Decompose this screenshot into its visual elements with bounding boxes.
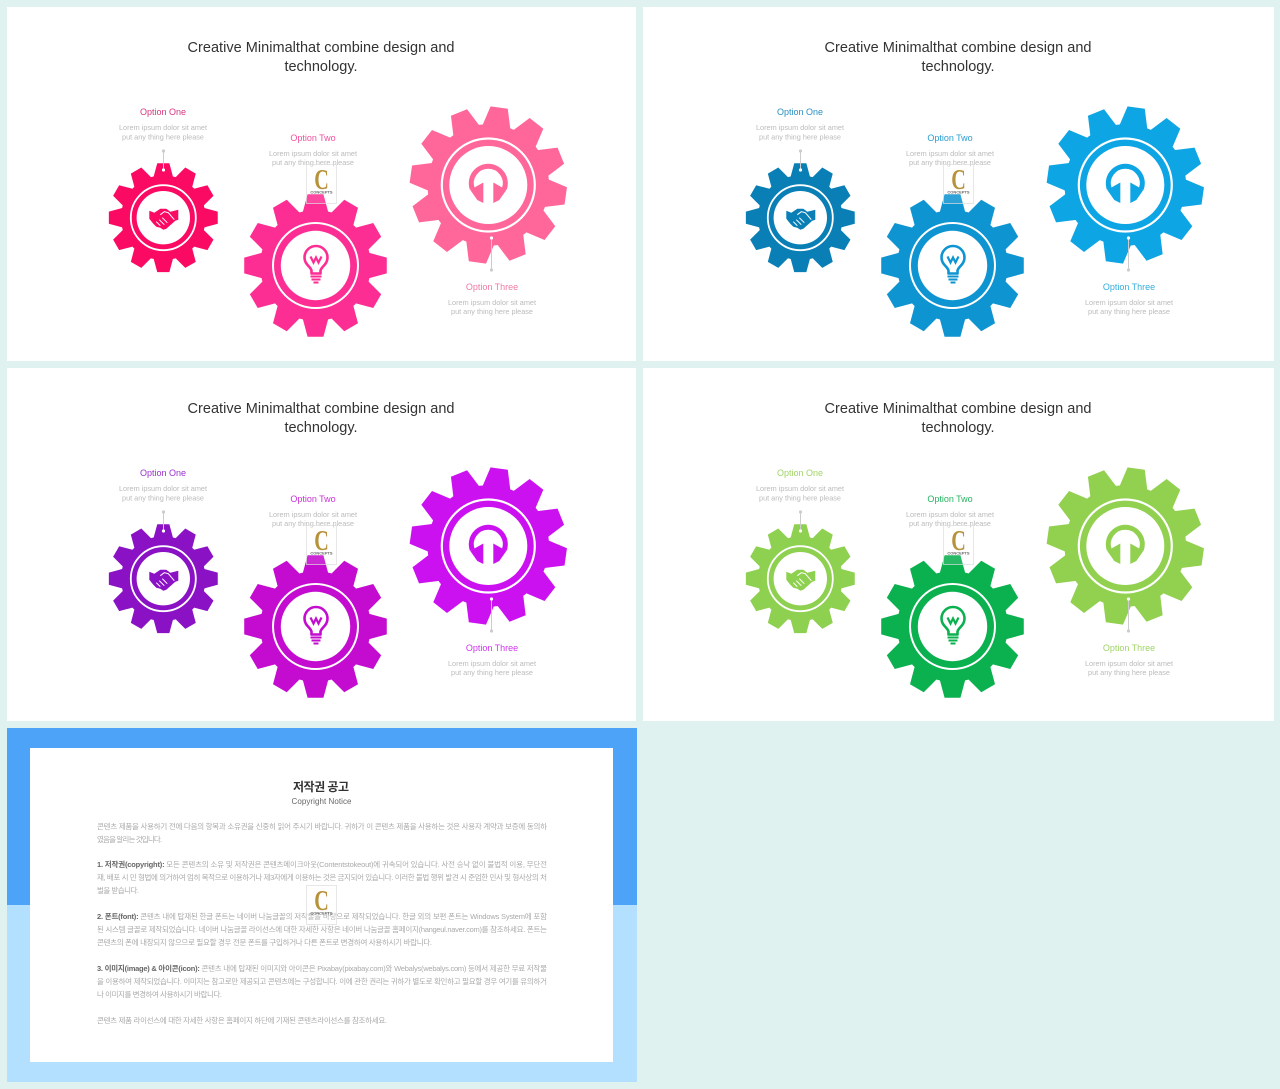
label: option one — [756, 107, 844, 142]
label: option two: Option Two — [290, 133, 336, 143]
label: option three — [1085, 643, 1173, 677]
label: option two: put any thing here please — [909, 519, 991, 528]
connector: option one — [162, 151, 164, 170]
title: Creative Minimalthat combine design and — [188, 40, 454, 56]
text block: intro: 콘텐츠 제품을 사용하기 전에 다음의 항목과 소유권을 신중히 읽어 주시기 바랍니다. 귀하가 이 콘텐츠 제품을 사용하는 것은 사용자 계약과 보증에 동의하 — [97, 821, 547, 831]
label: option one: put any thing here please — [122, 132, 204, 142]
text block: copyright: 재, 배포 시 민 형법에 의거하여 엄히 목적으로 이용하거나 제3자에게 이용하는 것은 금지되어 있습니다. 이러한 불법 행위 발견 시 준엄한 민사 및 형사상의 처 — [97, 872, 547, 882]
label: option one — [119, 468, 207, 502]
watermark — [944, 526, 974, 564]
gear: option two — [244, 555, 387, 698]
label: option three — [1085, 282, 1173, 316]
text block: image and icon: 3. 이미지(image) & 아이콘(icon): 콘텐츠 내에 탑재된 이미지와 아이콘은 Pixabay(pixabay.com)와 Webalys(webalys.com) 등에서 제공한 무료 저작물 — [97, 963, 547, 973]
panel: copyright notice — [7, 728, 637, 1082]
label: option three — [448, 282, 536, 316]
connector: option one — [800, 151, 802, 170]
watermark: C — [951, 526, 966, 557]
text block: font: 콘텐츠의 폰에 내장되지 않으므로 필요할 경우 전문 폰트를 구입하거나 다른 폰트로 변경하여 사용하시기 바랍니다. — [97, 937, 432, 947]
watermark — [944, 164, 974, 204]
label: option three: put any thing here please — [451, 668, 533, 677]
watermark: CONCEPTS — [310, 910, 333, 916]
text block: license note: 콘텐츠 제품 라이선스에 대한 자세한 사항은 홈페이지 하단에 기재된 콘텐츠라이선스를 참조하세요. — [97, 1015, 387, 1025]
watermark: C — [314, 165, 329, 196]
label: option one: put any thing here please — [759, 132, 841, 142]
gear: option one — [746, 524, 855, 633]
label: option three: Lorem ipsum dolor sit amet — [448, 659, 536, 668]
gear: option three — [1037, 458, 1214, 634]
label: option one: put any thing here please — [759, 494, 841, 502]
label: option two — [269, 133, 357, 167]
label: option one — [119, 107, 207, 142]
watermark: CONCEPTS — [947, 190, 970, 194]
text block: copyright: 벌을 받습니다. — [97, 885, 139, 895]
label: option three: Option Three — [466, 282, 518, 292]
watermark — [306, 164, 336, 204]
watermark: CONCEPTS — [310, 190, 333, 194]
watermark: CONCEPTS — [310, 550, 333, 556]
watermark — [306, 886, 336, 924]
label: option two: Option Two — [290, 494, 336, 504]
title: technology. — [921, 59, 995, 75]
label: option one: Lorem ipsum dolor sit amet — [119, 123, 207, 132]
watermark: C — [951, 165, 966, 196]
label: option two: Option Two — [927, 133, 973, 143]
label: option two — [269, 494, 357, 528]
title: technology. — [284, 420, 358, 436]
connector: option one — [800, 512, 802, 531]
title: Creative Minimalthat combine design and — [824, 40, 1092, 56]
gear: option three — [1037, 97, 1214, 273]
watermark: CONCEPTS — [947, 550, 970, 556]
label: option one: Option One — [140, 107, 186, 117]
watermark: C — [314, 886, 329, 917]
panel: green gears — [643, 368, 1274, 721]
text block: font: 된 시스템 글꼴로 제작되었습니다. 네이버 나눔글꼴 라이선스에 대한 자세한 사항은 네이버 나눔글꼴 홈페이지(hangeul.naver.com)를 참조하세요. 폰트는 — [97, 924, 547, 934]
label: option two: put any thing here please — [272, 519, 354, 528]
text block: font: 2. 폰트(font): 콘텐츠 내에 탑재된 한글 폰트는 네이버 나눔글꼴의 저작물을 바탕으로 제작되었습니다. 한글 외의 보편 폰트는 Windows System에 포함 — [97, 911, 547, 921]
title: technology. — [921, 420, 995, 436]
text block: image and icon: 을 이용하여 제작되었습니다. 이미지는 참고로만 제공되고 콘텐츠에는 구성합니다. 이에 관한 권리는 귀하가 별도로 확인하고 필요할 경우 여기를 유의하거 — [97, 976, 547, 986]
text block: image and icon — [97, 963, 547, 999]
label: option three: Option Three — [466, 643, 518, 653]
gear: option one — [109, 524, 218, 633]
gear: option three — [400, 97, 577, 273]
heading: copyright: Copyright Notice — [292, 797, 352, 806]
connector: option three — [1128, 599, 1130, 631]
label: option one: Lorem ipsum dolor sit amet — [119, 484, 207, 493]
title: Creative Minimalthat combine design and — [188, 401, 454, 417]
heading: copyright: 저작권 공고 — [293, 779, 349, 794]
label: option one — [756, 468, 844, 502]
label: option two: Option Two — [927, 494, 973, 504]
label: option two: Lorem ipsum dolor sit amet — [269, 510, 357, 519]
label: option three: put any thing here please — [1088, 668, 1170, 677]
label: option three — [448, 643, 536, 677]
text block: copyright — [97, 859, 547, 895]
label: option three: Option Three — [1103, 643, 1155, 653]
heading: copyright — [292, 779, 352, 806]
text block: intro — [97, 821, 547, 844]
label: option two — [906, 133, 994, 167]
label: option two: put any thing here please — [272, 158, 354, 167]
gear: option one — [109, 163, 218, 272]
label: option three: Lorem ipsum dolor sit amet — [1085, 298, 1173, 307]
label: option one: Option One — [777, 468, 823, 478]
text block: intro: 였음을 알리는 것입니다. — [97, 834, 162, 844]
connector: option three — [490, 599, 492, 631]
text block: copyright: 1. 저작권(copyright): 모든 콘텐츠의 소유 및 저작권은 콘텐츠메이크아웃(Contentstokeout)에 귀속되어 있습니다. 사전 승낙 없이 불법적 이용, 무단전 — [97, 859, 547, 869]
watermark — [306, 526, 336, 564]
panel: blue gears — [643, 7, 1274, 361]
panel: pink gears — [7, 7, 636, 361]
label: option two — [906, 494, 994, 528]
label: option two: put any thing here please — [909, 158, 991, 167]
text block: image and icon: 나 이미지를 변경하여 사용하시기 바랍니다. — [97, 989, 222, 999]
label: option one: Option One — [140, 468, 186, 478]
label: option three: Option Three — [1103, 282, 1155, 292]
gear: option two — [881, 555, 1024, 698]
label: option one: Lorem ipsum dolor sit amet — [756, 484, 844, 493]
watermark: C — [314, 526, 329, 557]
connector: option one — [162, 512, 164, 531]
connector: option three — [1128, 238, 1130, 270]
text block: font — [97, 911, 547, 947]
label: option three: put any thing here please — [451, 307, 533, 316]
label: option three: put any thing here please — [1088, 307, 1170, 316]
label: option two: Lorem ipsum dolor sit amet — [269, 149, 357, 158]
gear: option two — [244, 194, 387, 337]
label: option three: Lorem ipsum dolor sit amet — [448, 298, 536, 307]
gear: option three — [400, 458, 577, 634]
label: option two: Lorem ipsum dolor sit amet — [906, 510, 994, 519]
label: option one: Option One — [777, 107, 823, 117]
label: option one: put any thing here please — [122, 494, 204, 502]
label: option one: Lorem ipsum dolor sit amet — [756, 123, 844, 132]
connector: option three — [490, 238, 492, 270]
title: technology. — [284, 59, 358, 75]
title: Creative Minimalthat combine design and — [824, 401, 1092, 417]
gear: option two — [881, 194, 1024, 337]
label: option three: Lorem ipsum dolor sit amet — [1085, 659, 1173, 668]
label: option two: Lorem ipsum dolor sit amet — [906, 149, 994, 158]
panel: purple gears — [7, 368, 636, 721]
gear: option one — [746, 163, 855, 272]
